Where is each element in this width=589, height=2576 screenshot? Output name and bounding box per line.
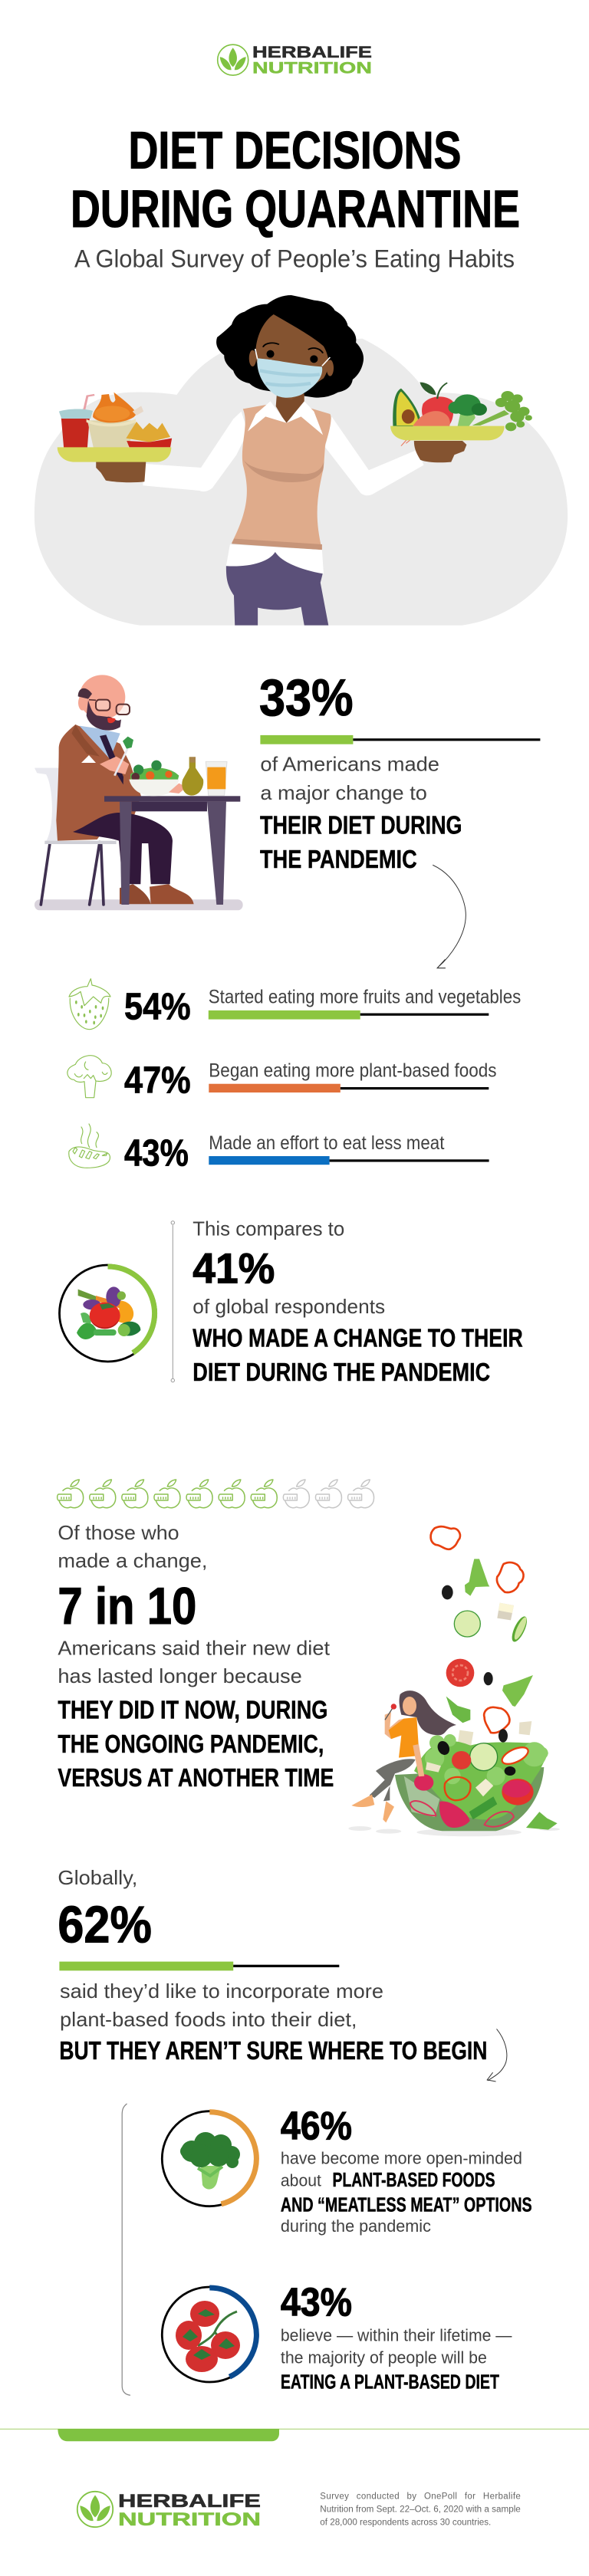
stat: 7 in 10: Americans said their new diet [58,1636,331,1659]
ring chart: 41% with vegetables [60,1265,156,1362]
subtitle: A Global Survey of People’s Eating Habits [74,245,515,273]
stat: 46%: about [281,2171,321,2190]
left tray: fast food [58,393,172,482]
illustration: woman sitting on a salad bowl [348,1526,560,1836]
stat row: 54% fruits and vegetables: 54% [124,987,191,1028]
stat: 46%: have become more open-minded [281,2149,522,2168]
pictogram: 7 of 10 apples [58,1480,374,1508]
stat: 62%: Globally, [58,1866,137,1889]
icon: strawberry [69,979,110,1030]
stat: 41%: WHO MADE A CHANGE TO THEIR [192,1324,523,1352]
stat: 43%: 43% [281,2280,352,2325]
stat: 41%: of global respondents [192,1295,385,1318]
stat row: 43% less meat: Made an effort to eat less meat [209,1132,444,1154]
stat: 7 in 10 [58,1521,334,1792]
stat: 33%: of Americans made [260,753,439,776]
bracket line [122,2104,130,2395]
stat: 46% [281,2104,532,2236]
stat: 41% [192,1217,523,1386]
arrow: curved down to breakdown [433,865,466,968]
stat: 7 in 10: THEY DID IT NOW, DURING [58,1695,327,1723]
title [71,121,520,238]
stat row: 54% fruits and vegetables [124,987,521,1028]
header logo: NUTRITION [252,59,372,77]
stat: 46%: 46% [281,2104,352,2148]
stat row: 47% plant-based foods: Began eating more plant-based foods [209,1060,497,1082]
header logo [218,44,372,77]
divider: vertical bracket line [171,1221,175,1382]
stat: 46%: during the pandemic [281,2216,431,2236]
stat: 33%: THE PANDEMIC [260,845,417,873]
hero illustration: woman with two trays of food [35,295,568,626]
footnote: survey source: Nutrition from Sept. 22–Oct. 6, 2020 with a sample [320,2505,521,2514]
stat row: 47% plant-based foods [124,1060,497,1101]
stat: 7 in 10: has lasted longer because [58,1664,302,1687]
stat: 43%: EATING A PLANT-BASED DIET [281,2371,499,2394]
stat: 62%: 62% [58,1895,152,1953]
footer logo: HERBALIFE [118,2491,261,2512]
stat: 46%: PLANT-BASED FOODS [333,2168,495,2191]
stat: 43% [281,2280,512,2394]
title: DIET DECISIONS [129,121,462,180]
stat: 41%: This compares to [192,1217,344,1240]
stat row: 43% less meat [124,1132,489,1174]
stat: 41%: DIET DURING THE PANDEMIC [192,1358,490,1386]
stat: 62% [58,1866,487,2065]
stat row: 54% fruits and vegetables: Started eating more fruits and vegetables [209,987,521,1008]
right tray: healthy food [390,383,532,462]
illustration: man eating salad at a table [35,675,243,910]
footer logo: NUTRITION [118,2509,261,2530]
stat: 33%: a major change to [260,781,427,804]
header logo: HERBALIFE [252,44,372,61]
stat: 33% [259,669,540,873]
stat: 62%: plant-based foods into their diet, [60,2008,357,2031]
icon: steak [69,1124,110,1168]
stat: 33%: 33% [259,669,353,727]
stat: 33%: THEIR DIET DURING [260,811,462,839]
stat: 62%: BUT THEY AREN’T SURE WHERE TO BEGIN [59,2036,487,2065]
footer divider and tab [0,2429,589,2441]
stat: 7 in 10: Of those who [58,1521,179,1544]
ring chart: 46% with broccoli [162,2111,257,2206]
footnote: survey source [320,2492,521,2528]
stat: 43%: believe — within their lifetime — [281,2326,512,2345]
stat: 7 in 10: THE ONGOING PANDEMIC, [58,1730,324,1758]
ring chart: 43% with tomatoes [162,2287,257,2382]
arrow: curved down to details [487,2029,507,2082]
footnote: survey source: Survey conducted by OnePoll for Herbalife [320,2492,521,2501]
footnote: survey source: of 28,000 respondents across 30 countries. [320,2518,491,2528]
stat: 43%: the majority of people will be [281,2348,487,2367]
stat: 7 in 10: 7 in 10 [58,1577,196,1635]
stat row: 47% plant-based foods: 47% [124,1060,191,1101]
stat: 7 in 10: made a change, [58,1549,207,1572]
stat: 41%: 41% [192,1244,275,1293]
icon: broccoli [67,1056,111,1098]
footer logo [77,2491,261,2530]
stat: 62%: said they’d like to incorporate more [60,1980,383,2003]
stat: 7 in 10: VERSUS AT ANOTHER TIME [58,1763,334,1792]
stat row: 43% less meat: 43% [124,1132,189,1174]
